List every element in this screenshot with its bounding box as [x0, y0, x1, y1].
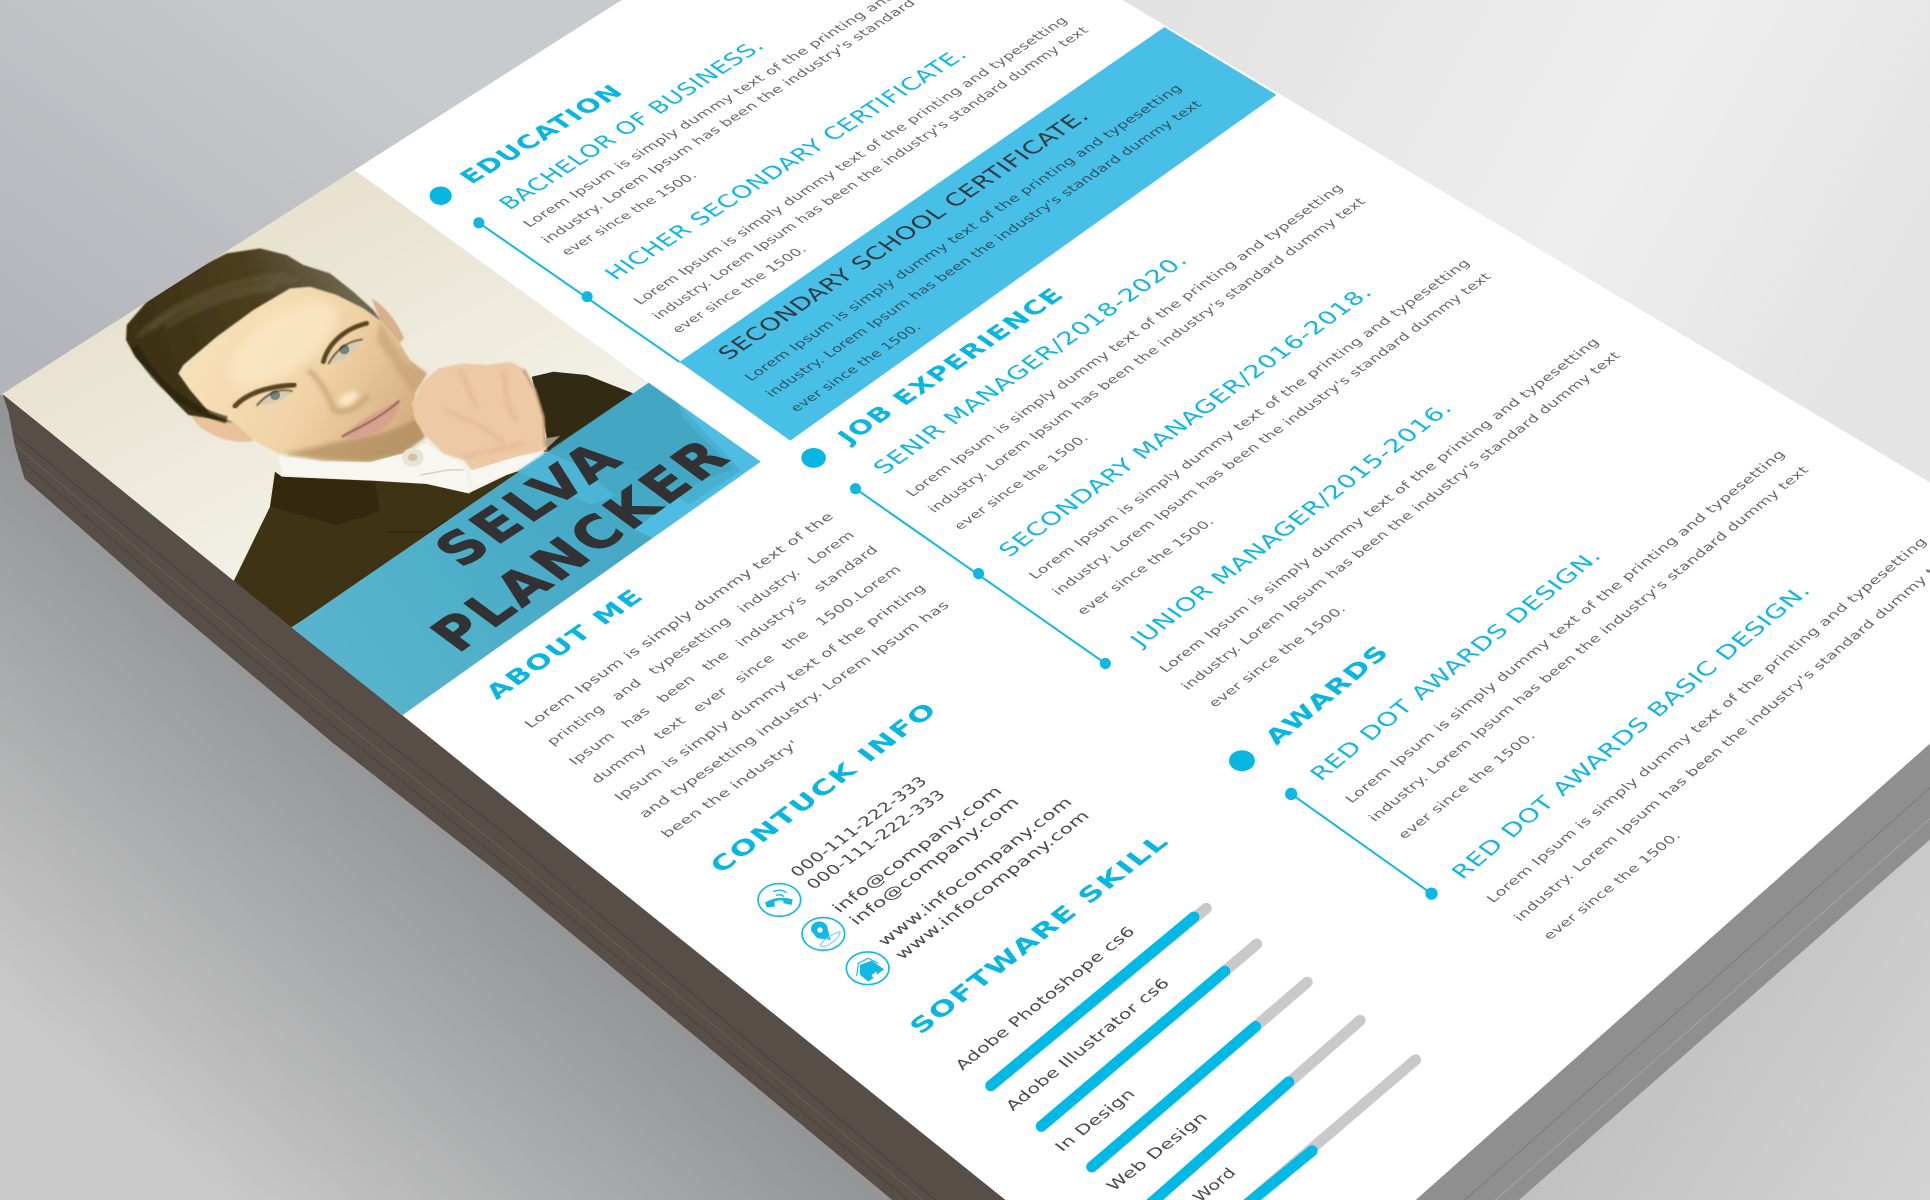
text block: bachelor of business: ever since the 1500.: [558, 169, 701, 258]
heading: education: EDUCATION: [454, 80, 630, 188]
text block: secondary manager: ever since the 1500.: [1073, 515, 1218, 617]
text block: about me paragraph: [521, 510, 953, 840]
face: [178, 287, 427, 462]
hand: [412, 362, 547, 472]
text block: junior manager: [1124, 335, 1624, 710]
text block: senior manager: [868, 181, 1369, 532]
text block: skill labels: [952, 924, 1240, 1200]
icon: phone: [758, 884, 801, 916]
text: and typesetting industry. Lorem Ipsum has: [635, 598, 953, 820]
heading: software skill: SOFTWARE SKILL: [903, 829, 1175, 1039]
text block: red dot awards design: ever since the 1500.: [1395, 729, 1539, 841]
text block: contact details: www.infocompany.com: [891, 807, 1094, 962]
ear: [190, 412, 253, 442]
text block: red dot awards basic design: ever since the 1500.: [1540, 829, 1684, 942]
bar chart: software skills: [991, 908, 1415, 1200]
text block: red dot awards basic design: [1446, 535, 1930, 942]
text: Ipsum has been the industry's standard: [565, 543, 881, 767]
panel: portrait photo: [2, 170, 649, 628]
heading: contact info: CONTUCK INFO: [705, 698, 944, 877]
heading: about me: ABOUT ME: [479, 584, 650, 704]
text block: higher secondary certificate: ever since the 1500.: [669, 243, 810, 336]
text block: secondary manager: [993, 257, 1494, 617]
text: Lorem Ipsum is simply dummy text of the: [521, 510, 837, 731]
timeline: awards: [1285, 788, 1438, 900]
heading: job experience: JOB EXPERIENCE: [830, 283, 1071, 449]
stubble and jaw shade: [283, 417, 425, 462]
icon: location pin: [802, 918, 845, 950]
text block: contact details: www.infocompany.com: [874, 794, 1076, 949]
text block: skill labels: Web Design: [1103, 1109, 1212, 1194]
paper stack: left side: [2, 394, 1022, 1200]
text block: contact details: 000-111-222-333: [787, 773, 931, 880]
text block: contact details: info@company.com: [845, 794, 1023, 928]
panel: name band: [292, 383, 761, 715]
section bullet: job experience: [801, 448, 826, 468]
text block: skill labels: Adobe Photoshope cs6: [952, 924, 1139, 1073]
timeline: job experience: [850, 483, 1111, 669]
timeline: education: [473, 217, 679, 362]
icon: home: [846, 952, 889, 985]
text block: contact details: 000-111-222-333: [803, 787, 950, 892]
text block: senior manager: ever since the 1500.: [950, 431, 1092, 532]
panel: secondary school highlight band: [679, 27, 1276, 441]
text block: junior manager: ever since the 1500.: [1205, 603, 1349, 710]
text block: red dot awards design: [1305, 447, 1812, 841]
shirt cuff: [470, 451, 548, 487]
text block: secondary school certificate: [713, 82, 1205, 414]
jacket: [233, 372, 633, 628]
lips: [342, 400, 399, 438]
text block: contact details: [787, 773, 1094, 962]
eyebrows: [235, 385, 294, 406]
text: Ipsum is simply dummy text of the printing: [611, 581, 929, 803]
hair: [126, 248, 381, 423]
shirt collar: [278, 443, 470, 493]
section bullet: education: [430, 186, 452, 205]
text: dummy text ever since the 1500.Lorem: [587, 563, 905, 786]
text block: skill labels: Adobe Illustrator cs6: [1002, 975, 1173, 1114]
text block: about me paragraph: been the industry': [658, 738, 803, 840]
name: Selva: SELVA: [422, 431, 637, 577]
paper stack: right side: [1415, 743, 1930, 1200]
text block: contact details: info@company.com: [828, 783, 1006, 916]
text block: secondary school certificate: ever since the 1500.: [788, 321, 925, 414]
text: printing and typesetting industry. Lorem: [543, 528, 858, 748]
section bullet: awards: [1229, 750, 1255, 771]
eyes: [258, 391, 292, 405]
text: PLANCKER: [418, 428, 744, 661]
heading: awards: AWARDS: [1259, 641, 1396, 750]
nose: [308, 370, 368, 412]
text block: higher secondary certificate: [599, 14, 1092, 336]
text block: skill labels: In Design: [1051, 1086, 1140, 1155]
